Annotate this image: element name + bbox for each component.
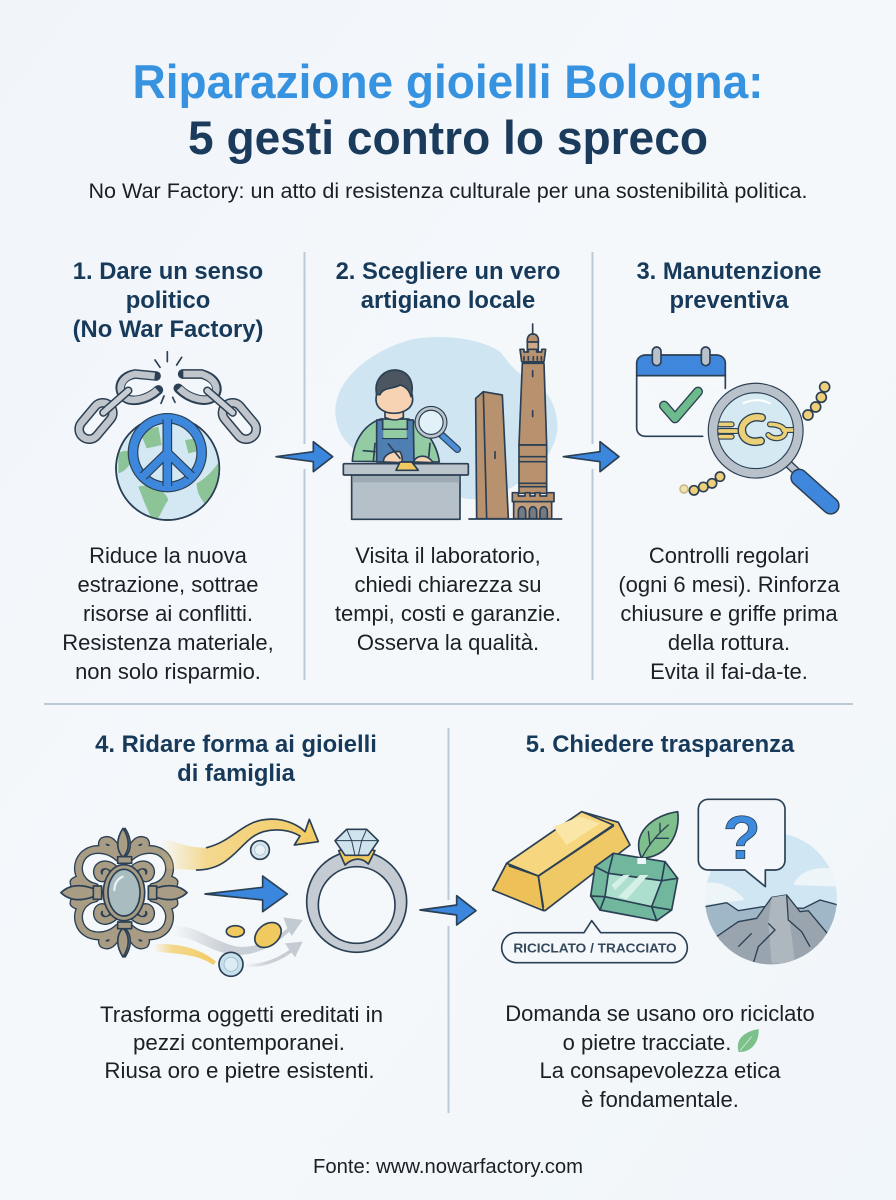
body text: step 5: La consapevolezza etica bbox=[540, 1058, 781, 1083]
panel: step 3 bbox=[618, 258, 840, 684]
gold arrow bbox=[160, 819, 318, 870]
body text: step 1: estrazione, sottrae bbox=[78, 572, 258, 597]
heading: step 4: 4. Ridare forma ai gioielli bbox=[95, 731, 377, 758]
body text: step 3: (ogni 6 mesi). Rinforza bbox=[618, 572, 840, 597]
badge: recycled / traced: RICICLATO / TRACCIATO bbox=[513, 942, 677, 956]
subtitle: No War Factory: un atto di resistenza culturale per una sostenibilità politica. bbox=[88, 180, 808, 203]
artisan bbox=[352, 370, 439, 463]
heading: step 4: di famiglia bbox=[177, 760, 296, 787]
heading: step 2: artigiano locale bbox=[361, 287, 535, 314]
arrow: step 2 to 3 bbox=[563, 442, 619, 472]
body text: step 5 bbox=[505, 1001, 815, 1112]
loupe bbox=[417, 408, 457, 449]
body text: step 4: pezzi contemporanei. bbox=[133, 1030, 345, 1055]
icon: gold bar, emerald, question, mine bbox=[493, 799, 840, 970]
heading: step 3 bbox=[636, 258, 822, 314]
chain links bbox=[75, 374, 260, 443]
body text: step 2: Osserva la qualità. bbox=[357, 630, 539, 655]
heading: step 4 bbox=[95, 731, 377, 787]
body text: step 2: chiedi chiarezza su bbox=[354, 572, 542, 597]
magnifier bbox=[713, 388, 831, 506]
emerald bbox=[591, 853, 678, 921]
icon: artisan and Bologna towers bbox=[335, 324, 562, 519]
body text: step 3 bbox=[618, 543, 840, 684]
body text: step 2: tempi, costi e garanzie. bbox=[335, 601, 561, 626]
icon: broken chain and peace globe bbox=[75, 352, 260, 523]
arrow: step 1 to 2 bbox=[276, 442, 333, 472]
heading: step 1: politico bbox=[126, 287, 210, 314]
body text: step 3: chiusure e griffe prima bbox=[620, 601, 838, 626]
gold chain in lens bbox=[720, 417, 793, 442]
heading: step 2: 2. Scegliere un vero bbox=[336, 258, 560, 285]
panel: step 4 bbox=[61, 731, 407, 1083]
desk bbox=[343, 462, 468, 519]
icon: small leaf bbox=[738, 1029, 759, 1052]
panel: step 1 bbox=[62, 258, 274, 684]
brooch bbox=[61, 828, 187, 957]
heading: step 1 bbox=[73, 258, 263, 343]
body text: step 1: risorse ai conflitti. bbox=[83, 601, 253, 626]
calendar bbox=[637, 347, 725, 436]
title: 5 gesti contro lo spreco bbox=[188, 111, 708, 164]
body text: step 1 bbox=[62, 543, 274, 684]
panel: step 5 bbox=[493, 731, 840, 1112]
body text: step 3: Controlli regolari bbox=[649, 543, 809, 568]
heading: step 1: 1. Dare un senso bbox=[73, 258, 263, 285]
speech bubble with question mark: ? bbox=[723, 803, 760, 872]
heading: step 3: preventiva bbox=[669, 287, 789, 314]
body text: step 2: Visita il laboratorio, bbox=[355, 543, 541, 568]
badge: recycled / traced bbox=[502, 921, 687, 963]
loose gems and gold bbox=[219, 841, 286, 976]
title bbox=[132, 55, 764, 164]
heading: step 3: 3. Manutenzione bbox=[636, 258, 822, 285]
icon: brooch transformed into ring bbox=[61, 819, 407, 976]
heading: step 5: 5. Chiedere trasparenza bbox=[526, 731, 795, 758]
leaning tower bbox=[476, 392, 508, 519]
peace symbol bbox=[133, 418, 202, 487]
gold trail bbox=[153, 944, 216, 965]
heading: step 1: (No War Factory) bbox=[73, 316, 263, 343]
body text: step 5: Domanda se usano oro riciclato bbox=[505, 1001, 815, 1026]
body text: step 2 bbox=[335, 543, 561, 655]
body text: step 5: o pietre tracciate. bbox=[563, 1030, 731, 1055]
footer source: Fonte: www.nowarfactory.com bbox=[313, 1156, 583, 1178]
heading: step 2 bbox=[336, 258, 560, 314]
body text: step 4 bbox=[100, 1002, 383, 1083]
blue arrow bbox=[205, 876, 287, 912]
speech bubble with question mark bbox=[698, 799, 785, 887]
body text: step 1: non solo risparmio. bbox=[75, 659, 261, 684]
arrow: step 4 to 5 bbox=[420, 896, 476, 925]
title: Riparazione gioielli Bologna: bbox=[132, 55, 764, 108]
body text: step 1: Riduce la nuova bbox=[89, 543, 248, 568]
body text: step 4: Riusa oro e pietre esistenti. bbox=[104, 1058, 375, 1083]
body text: step 3: Evita il fai-da-te. bbox=[650, 659, 808, 684]
beads bbox=[680, 382, 830, 495]
Asinelli tower bbox=[469, 324, 562, 519]
body text: step 5: è fondamentale. bbox=[581, 1087, 739, 1112]
panel: step 2 bbox=[335, 258, 562, 655]
gold bar bbox=[493, 812, 630, 911]
body text: step 1: Resistenza materiale, bbox=[62, 630, 274, 655]
globe bbox=[116, 417, 219, 520]
backdrop blob bbox=[335, 337, 557, 499]
body text: step 4: Trasforma oggetti ereditati in bbox=[100, 1002, 383, 1027]
mine landscape bbox=[703, 832, 840, 970]
ring bbox=[307, 829, 407, 952]
grey flow arrows bbox=[173, 917, 303, 955]
icon: calendar and magnifier on chain bbox=[637, 347, 831, 506]
body text: step 3: della rottura. bbox=[668, 630, 790, 655]
leaf bbox=[639, 812, 678, 858]
